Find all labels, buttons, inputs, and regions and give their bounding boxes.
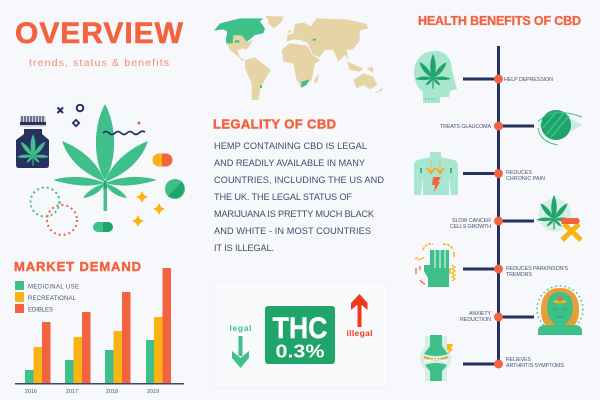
- benefit labels: TREMORS: [506, 272, 532, 278]
- bar chart: 2016: [25, 389, 37, 395]
- icon: calm face: [537, 286, 583, 335]
- icon: torso with pain: [414, 152, 458, 195]
- benefit labels: ANXIETY: [469, 311, 491, 317]
- legend: EDIBLES: [28, 308, 53, 314]
- bar chart: 2019: [147, 389, 159, 395]
- panel: market demand: [14, 259, 184, 395]
- THC badge: [265, 306, 335, 364]
- THC badge: THC: [272, 312, 328, 345]
- heading: HEALTH BENEFITS OF CBD: [418, 14, 581, 28]
- legend: MEDICINAL USE: [28, 284, 79, 290]
- body text: THE UK. THE LEGAL STATUS OF: [214, 192, 352, 202]
- icon: leaf and cancer ribbon: [536, 195, 581, 240]
- benefit labels: CELLS GROWTH: [450, 224, 491, 230]
- bar chart: [15, 268, 184, 395]
- icon: green circle: [165, 179, 185, 199]
- body text: AND READILY AVAILABLE IN MANY: [214, 158, 365, 168]
- benefit labels: REDUCES PARKINSON'S: [506, 266, 568, 272]
- bar chart: 2017: [66, 389, 78, 395]
- icon: bottle: [16, 116, 49, 168]
- body text: HEMP CONTAINING CBD IS LEGAL: [214, 141, 367, 151]
- decorative shapes: [30, 105, 145, 235]
- legal label and arrow: legal: [230, 323, 252, 333]
- icon: knee joint: [420, 335, 453, 381]
- icon: capsule: [93, 222, 113, 232]
- body text: COUNTRIES, INCLUDING THE US AND: [214, 175, 384, 185]
- world map: [214, 16, 383, 100]
- benefit labels: REDUCTION: [460, 317, 491, 323]
- subtitle: trends, status & benefits: [29, 57, 169, 69]
- legend: [15, 281, 79, 314]
- bar chart: 2018: [106, 389, 118, 395]
- heading: MARKET DEMAND: [14, 259, 141, 274]
- legend: RECREATIONAL: [28, 296, 77, 302]
- title: OVERVIEW: [15, 17, 184, 50]
- heading: LEGALITY OF CBD: [213, 116, 336, 132]
- benefit labels: SLOW CANCER: [452, 218, 491, 224]
- benefit labels: RELIEVES: [506, 357, 531, 363]
- benefit labels: CHRONIC PAIN: [506, 176, 545, 182]
- body text: AND WHITE - IN MOST COUNTRIES: [214, 226, 371, 236]
- panel: legality: [213, 116, 384, 253]
- icon: eye: [538, 110, 582, 145]
- body text: MARIJUANA IS PRETTY MUCH BLACK: [214, 209, 375, 219]
- icon: head with leaf: [414, 51, 457, 103]
- panel: overview: [15, 17, 185, 235]
- benefit labels: ARTHRITIS SYMPTOMS: [506, 363, 564, 369]
- icon: pill: [153, 154, 172, 166]
- illegal label and arrow: illegal: [346, 328, 372, 338]
- benefit labels: REDUCES: [506, 170, 532, 176]
- panel: health benefits: [414, 14, 583, 381]
- benefit labels: TREATS GLAUCOMA: [440, 124, 491, 130]
- illegal label and arrow: [346, 294, 372, 338]
- body text: [214, 141, 384, 253]
- legal label and arrow: [230, 323, 252, 368]
- icon: cannabis leaf: [53, 104, 157, 211]
- icon: sparkles: [132, 191, 165, 227]
- THC badge: 0.3%: [276, 342, 324, 362]
- body text: IT IS ILLEGAL.: [214, 243, 274, 253]
- timeline: [463, 46, 534, 368]
- benefit labels: HELP DEPRESSION: [504, 77, 553, 83]
- panel: THC limit: [215, 283, 388, 387]
- icon: trembling hand: [415, 244, 455, 287]
- benefit labels: [440, 77, 568, 369]
